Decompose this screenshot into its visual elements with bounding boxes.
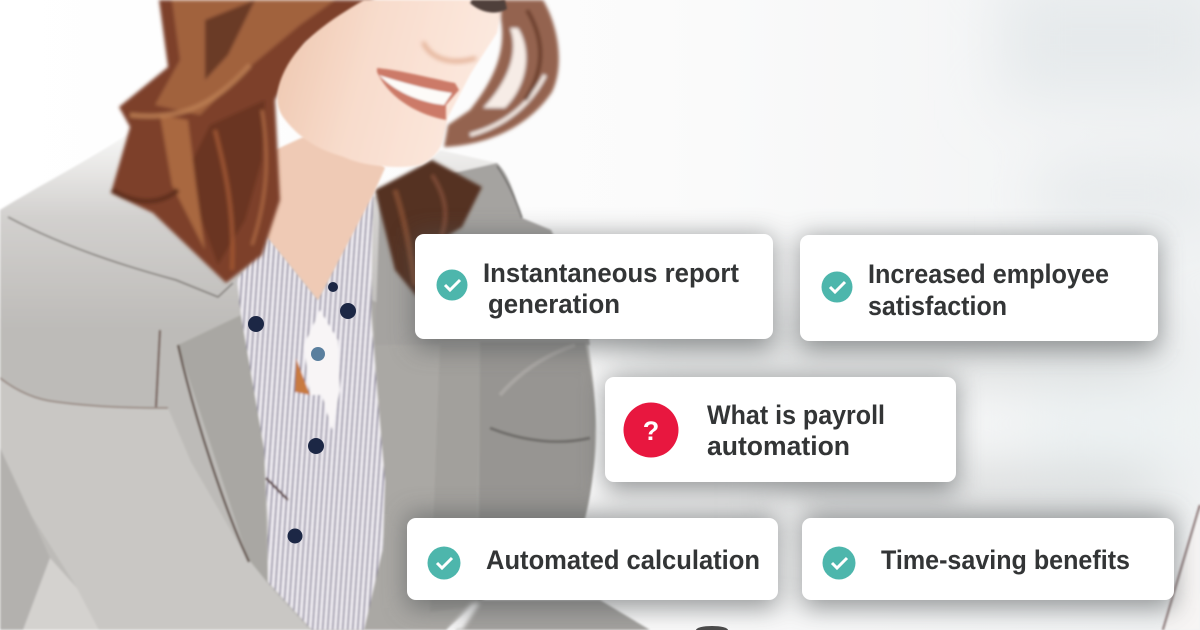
icon: teal check <box>822 272 852 302</box>
smile <box>377 68 459 120</box>
icon: teal check <box>436 270 468 300</box>
card text: Time-saving benefits <box>881 545 1130 575</box>
right shoulder <box>375 163 590 345</box>
icon: teal check <box>428 546 460 580</box>
sleeve at lower right <box>455 600 650 630</box>
card: increased employee satisfaction <box>800 235 1158 341</box>
card text: generation <box>488 289 620 319</box>
right front panel <box>364 300 480 630</box>
striped shirt <box>237 190 385 630</box>
white gap under card <box>448 603 480 630</box>
card text: Automated calculation <box>486 545 760 575</box>
card text: What is payroll <box>707 400 885 430</box>
face <box>277 0 503 167</box>
shirt buttons <box>248 282 356 544</box>
card text: Instantaneous report <box>483 258 739 288</box>
card text <box>868 259 1109 321</box>
card: instantaneous report generation <box>415 234 773 339</box>
card: time-saving benefits <box>802 518 1174 600</box>
nose <box>423 42 476 61</box>
right lapel band <box>430 342 480 612</box>
card text: Increased employee <box>868 259 1109 289</box>
right sleeve <box>478 342 596 604</box>
card: automated calculation <box>407 518 778 600</box>
inner left lapel <box>178 315 290 630</box>
card shadows <box>407 236 1174 608</box>
laptop edge <box>1163 505 1200 630</box>
card text <box>707 400 885 461</box>
card text: satisfaction <box>868 291 1007 321</box>
hair left <box>111 0 375 283</box>
neck <box>264 120 385 300</box>
eye <box>470 0 507 13</box>
icon: red question mark: ? <box>643 416 659 446</box>
object at bottom edge <box>696 626 728 630</box>
icon: red question mark <box>624 402 678 458</box>
card text <box>483 258 739 319</box>
card: what is payroll automation <box>605 377 956 482</box>
hair right <box>444 0 559 147</box>
hair back <box>375 160 482 297</box>
card text: automation <box>707 431 850 461</box>
left sleeve <box>0 378 310 630</box>
blazer <box>0 130 596 630</box>
under sleeve <box>0 448 50 630</box>
under sleeve highlight <box>23 558 99 630</box>
icon: teal check <box>822 546 856 580</box>
